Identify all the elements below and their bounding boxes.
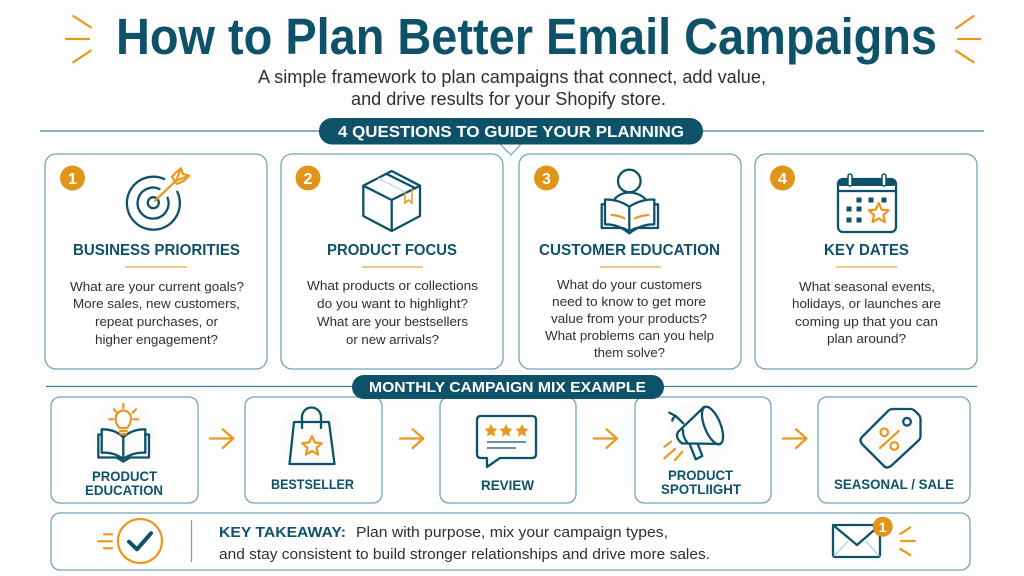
badge 3	[534, 166, 559, 190]
heading: CUSTOMER EDUCATION	[539, 242, 720, 259]
body text: need to know to get more	[552, 294, 706, 309]
body text	[307, 278, 478, 347]
badge 1	[60, 166, 85, 190]
label: SEASONAL / SALE	[834, 476, 954, 492]
body text	[70, 279, 244, 347]
arrow 4	[783, 429, 806, 448]
badge 2	[296, 166, 320, 190]
panel: product spotlight	[635, 397, 771, 503]
panel: business priorities	[45, 154, 267, 369]
label: PRODUCT	[668, 467, 733, 483]
body text	[545, 277, 714, 360]
body text: higher engagement?	[95, 332, 218, 347]
body text: coming up that you can	[795, 314, 938, 329]
panel: seasonal sale	[818, 397, 970, 503]
panel: review	[440, 397, 576, 503]
badge 4	[770, 166, 795, 190]
icon: left title rays	[66, 16, 91, 62]
body text: What problems can you help	[545, 328, 714, 343]
icon: envelope with notification	[833, 517, 915, 557]
icon: right title rays	[956, 16, 980, 62]
arrow 3	[594, 429, 617, 448]
subtitle	[258, 66, 766, 109]
label: REVIEW	[481, 477, 535, 493]
badge 1: 1	[68, 171, 77, 188]
icon: target with arrow	[127, 168, 189, 230]
body text: What seasonal events,	[799, 279, 935, 294]
body text: do you want to highlight?	[317, 296, 468, 311]
badge 3: 3	[542, 171, 551, 188]
panel: key takeaway	[51, 513, 970, 570]
body text: them solve?	[594, 345, 665, 360]
section heading: 4 questions: 4 QUESTIONS TO GUIDE YOUR PLANNING	[338, 124, 684, 141]
section heading: monthly campaign mix	[46, 375, 977, 399]
icon: review speech bubble	[477, 416, 536, 467]
subtitle: and drive results for your Shopify store.	[351, 88, 666, 109]
label: EDUCATION	[85, 482, 163, 498]
takeaway text	[219, 524, 710, 563]
icon: check circle	[98, 519, 162, 563]
subtitle: A simple framework to plan campaigns that connect, add value,	[258, 66, 766, 87]
body text: What do your customers	[557, 277, 702, 292]
panel: bestseller	[245, 397, 382, 503]
heading: KEY DATES	[824, 242, 909, 259]
panel: product education	[51, 397, 198, 503]
takeaway text: and stay consistent to build stronger relationships and drive more sales.	[219, 546, 710, 563]
body text: or new arrivals?	[346, 332, 439, 347]
body text: What products or collections	[307, 278, 478, 293]
icon: box	[363, 171, 420, 231]
arrow 2	[400, 429, 423, 448]
body text: More sales, new customers,	[73, 296, 240, 311]
heading: PRODUCT FOCUS	[327, 242, 457, 259]
body text: repeat purchases, or	[95, 314, 219, 329]
body text: plan around?	[827, 331, 906, 346]
badge 2: 2	[304, 171, 313, 188]
body text	[792, 279, 941, 346]
title: How to Plan Better Email Campaigns	[116, 8, 937, 65]
takeaway text: Plan with purpose, mix your campaign types,	[356, 524, 668, 541]
body text: What are your current goals?	[70, 279, 244, 294]
section heading: 4 questions	[40, 118, 984, 155]
icon: megaphone	[664, 404, 727, 460]
body text: What are your bestsellers	[317, 314, 468, 329]
label: PRODUCT	[92, 468, 157, 484]
label	[85, 468, 163, 498]
icon: price tag	[860, 409, 920, 468]
icon: person reading	[602, 170, 658, 233]
section heading: monthly campaign mix: MONTHLY CAMPAIGN MIX EXAMPLE	[369, 379, 646, 396]
icon: envelope with notification: 1	[879, 519, 887, 535]
label: SPOTLIIGHT	[661, 481, 741, 497]
icon: book with light bulb	[98, 404, 149, 462]
body text: holidays, or launches are	[792, 296, 941, 311]
body text: value from your products?	[551, 311, 707, 326]
heading: BUSINESS PRIORITIES	[73, 242, 240, 259]
badge 4: 4	[778, 171, 787, 188]
panel: customer education	[519, 154, 741, 369]
takeaway text: KEY TAKEAWAY:	[219, 524, 346, 541]
panel: key dates	[755, 154, 977, 369]
panel: product focus	[281, 154, 503, 369]
icon: calendar	[838, 174, 896, 232]
arrow 1	[210, 429, 233, 448]
label	[661, 467, 741, 497]
label: BESTSELLER	[271, 476, 354, 492]
icon: shopping bag with star	[290, 408, 334, 464]
